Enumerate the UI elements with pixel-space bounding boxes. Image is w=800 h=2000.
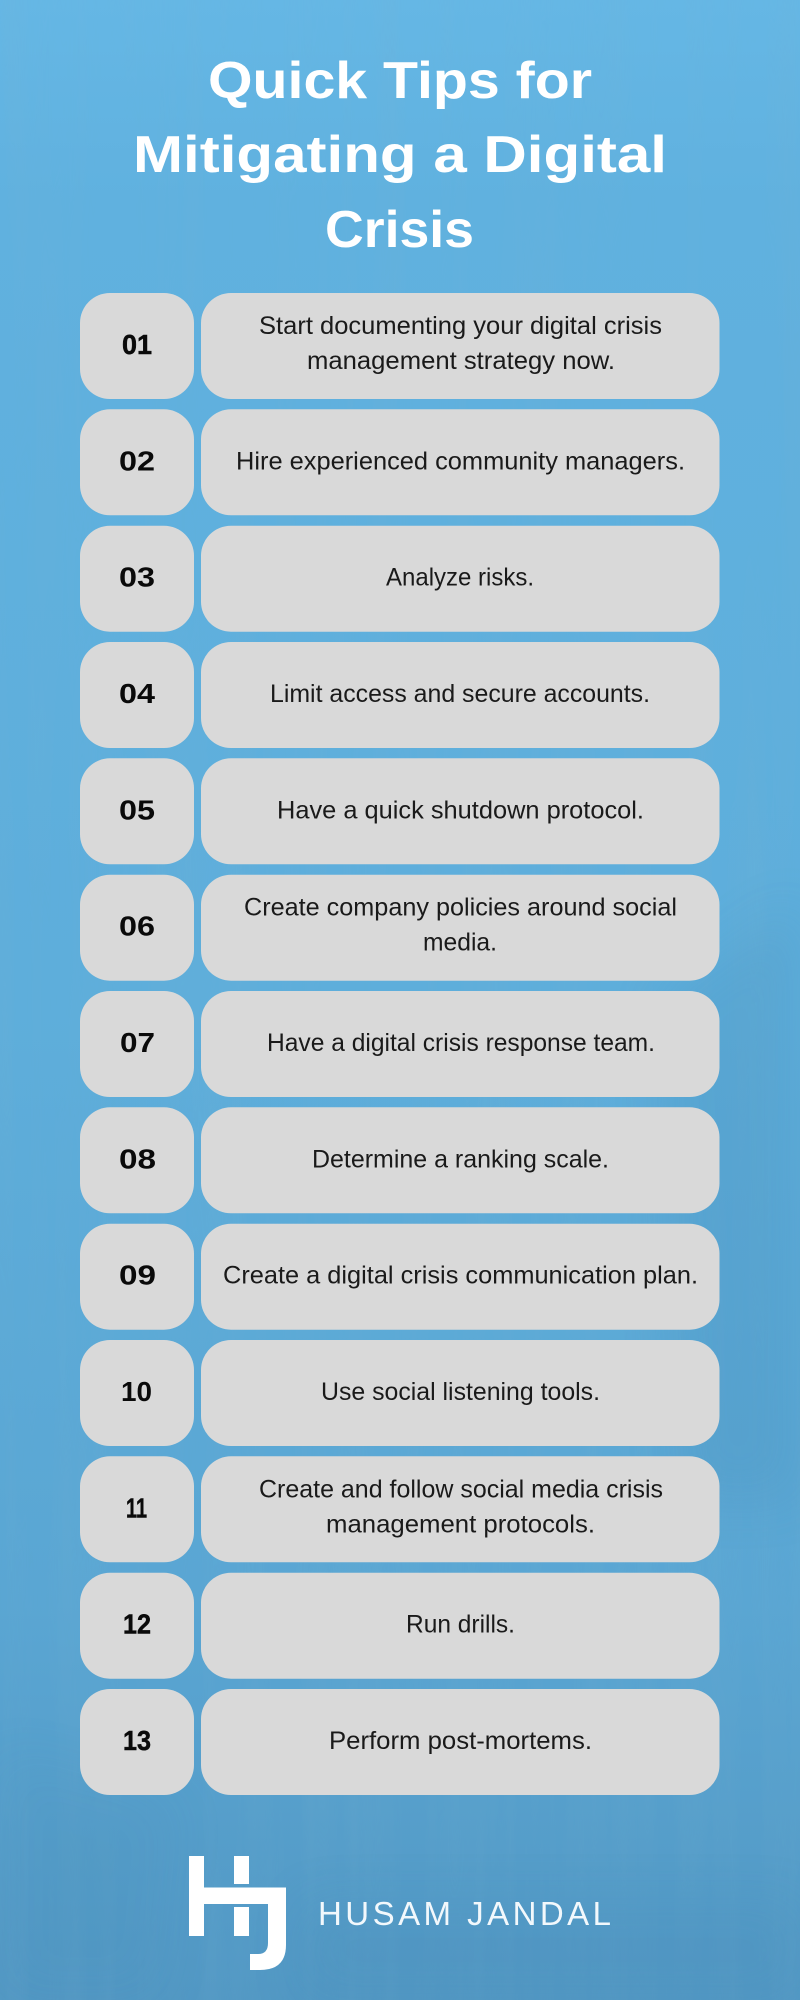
tip 11 xyxy=(80,1456,720,1562)
tip 09: Create a digital crisis communication plan. xyxy=(223,1262,698,1290)
tip 09: 09 xyxy=(119,1260,156,1291)
tip 08 xyxy=(80,1107,720,1213)
tip 06: Create company policies around social xyxy=(244,894,677,922)
tip 11: management protocols. xyxy=(326,1510,595,1538)
tip 07: Have a digital crisis response team. xyxy=(267,1029,655,1057)
tip 02 xyxy=(80,409,720,515)
tip 05: Have a quick shutdown protocol. xyxy=(277,796,644,824)
tip 02: Hire experienced community managers. xyxy=(236,447,685,475)
tip 12: 12 xyxy=(123,1609,151,1640)
tip 03: Analyze risks. xyxy=(386,564,534,592)
tip 01: Start documenting your digital crisis xyxy=(259,312,662,340)
tip 06 xyxy=(80,875,720,981)
title xyxy=(133,52,667,259)
tip 06: media. xyxy=(423,929,497,957)
title: Quick Tips for xyxy=(208,52,592,110)
tip 04: 04 xyxy=(119,678,155,709)
tip 04: Limit access and secure accounts. xyxy=(270,680,650,708)
tip 01 xyxy=(80,293,720,399)
tip 10: Use social listening tools. xyxy=(321,1378,600,1406)
icon: HJ monogram logo xyxy=(189,1856,286,1970)
tip 05: 05 xyxy=(119,794,155,825)
tip 12 xyxy=(80,1573,720,1679)
brand footer xyxy=(189,1856,611,1970)
tip 13: 13 xyxy=(123,1725,151,1756)
title: Crisis xyxy=(325,201,474,259)
tip 07: 07 xyxy=(120,1027,155,1058)
tip 12: Run drills. xyxy=(406,1611,515,1639)
tip list xyxy=(80,293,720,1795)
tip 13 xyxy=(80,1689,720,1795)
tip 05 xyxy=(80,758,720,864)
tip 01: 01 xyxy=(122,329,152,360)
tip 13: Perform post-mortems. xyxy=(329,1727,592,1755)
brand name: HUSAM JANDAL xyxy=(318,1895,611,1932)
tip 10 xyxy=(80,1340,720,1446)
tip 11: Create and follow social media crisis xyxy=(259,1475,663,1503)
tip 06: 06 xyxy=(119,911,155,942)
tip 11: 11 xyxy=(126,1492,147,1523)
tip 02: 02 xyxy=(119,445,155,476)
tip 03 xyxy=(80,526,720,632)
tip 10: 10 xyxy=(121,1376,152,1407)
tip 08: Determine a ranking scale. xyxy=(312,1145,609,1173)
tip 08: 08 xyxy=(119,1143,156,1174)
tip 03: 03 xyxy=(119,562,155,593)
tip 04 xyxy=(80,642,720,748)
title: Mitigating a Digital xyxy=(133,126,667,184)
tip 07 xyxy=(80,991,720,1097)
tip 01: management strategy now. xyxy=(307,347,615,375)
tip 09 xyxy=(80,1224,720,1330)
